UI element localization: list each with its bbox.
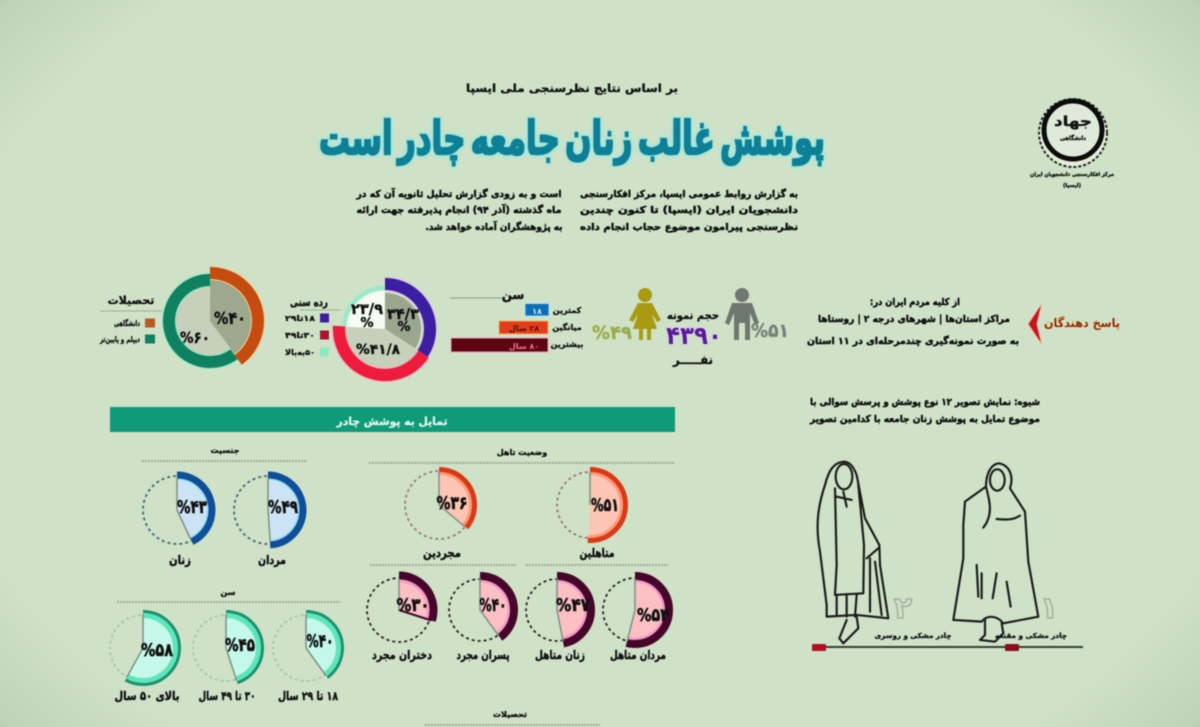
pie: single 36 (404, 470, 474, 540)
legend: education: تحصیلات (108, 294, 154, 307)
pie: married women 47: %۴۷ (556, 595, 590, 616)
illustration: chador and scarf (818, 462, 888, 643)
age bars: کمترین (553, 306, 582, 315)
heading: marital status: وضعیت تاهل (497, 448, 547, 457)
age bars: میانگین (552, 322, 582, 332)
label: single boys: پسران مجرد (456, 648, 510, 662)
pie: single girls 30: %۳۰ (396, 595, 430, 616)
logo: مرکز افکارسنجی دانشجویان ایران (1030, 171, 1114, 178)
label: married women: زنان متاهل (535, 648, 585, 662)
intro text: left column: است و به زودی گزارش تحلیل ثانویه آن که در (356, 187, 562, 200)
icon: man (725, 288, 759, 340)
pie: single 36: %۳۶ (436, 493, 468, 514)
male share: %۵۱ (751, 320, 789, 342)
number 1: ۱ (1040, 591, 1058, 626)
age bars: سن (502, 288, 524, 302)
banner: tendency to chador (110, 407, 675, 432)
legend: education (99, 294, 162, 344)
pie: married men 54 (601, 576, 669, 644)
legend: education: دیپلم و پایین‌تر (99, 335, 140, 344)
intro text: right column: به گزارش روابط عمومی ایسپا، مرکز افکارسنجی (580, 188, 798, 200)
logo: (ایسپا) (1063, 183, 1081, 189)
donut: age groups: %۴۱/۸ (356, 342, 400, 358)
label: single: مجردین (423, 546, 461, 560)
subtitle: بر اساس نتایج نظرسنجی ملی ایسپا (466, 82, 678, 95)
label: single girls: دختران مجرد (372, 648, 432, 662)
pie: age 30 to 49: %۴۵ (225, 635, 255, 656)
pie: men 49 (233, 475, 303, 545)
legend: age groups: رده سنی (290, 296, 328, 309)
pie: women 43: %۴۳ (177, 497, 207, 518)
respondents description: مراکز استان‌ها | شهرهای درجه ۲ | روستاها (818, 314, 1010, 325)
age bars: بیشترین (551, 340, 583, 349)
timeline (812, 644, 1083, 651)
heading: age: سن (220, 588, 236, 597)
label: men: مردان (258, 553, 286, 567)
icon: woman (629, 288, 661, 340)
legend: age groups: ۳۰تا۴۹ (285, 331, 315, 340)
donut: education (153, 264, 267, 378)
respondents description: از کلیه مردم ایران در: (870, 297, 960, 308)
heading: gender: جنسیت (211, 446, 240, 455)
donut: age groups: ۳۴/۳ (387, 305, 419, 323)
label: age 18 to 29: ۱۸ تا ۲۹ سال (278, 689, 339, 703)
intro text: left column (356, 187, 562, 233)
pie: age 18 to 29: %۴۰ (306, 631, 334, 652)
method text (809, 397, 1040, 425)
pie: age over 50: %۵۸ (141, 640, 173, 661)
intro text: right column: دانشجویان ایران (ایسپا) تا کنون چندین (580, 205, 798, 216)
pie: women 43 (142, 475, 212, 545)
age bars: ۸۰ سال (509, 342, 539, 351)
method text: شیوه: نمایش تصویر ۱۲ نوع پوشش و پرسش سوالی با (810, 397, 1040, 408)
pie: age over 50 (106, 612, 180, 684)
donut: education: %۶۰ (180, 328, 210, 347)
pie: age 30 to 49 (190, 612, 262, 684)
pie: married women 47 (523, 576, 591, 644)
sample size (666, 309, 722, 367)
logo: جهاد (1054, 114, 1092, 130)
legend: education: دانشگاهی (114, 318, 140, 328)
label: women: زنان (169, 553, 191, 567)
donut: education: %۴۰ (214, 309, 246, 329)
age bars (450, 288, 583, 352)
pie: married 51 (554, 470, 626, 540)
sample size: نفـــــر (672, 353, 713, 367)
donut: age groups: % (397, 320, 411, 335)
age bars: ۲۸ سال (509, 324, 539, 333)
pie: married 51: %۵۱ (591, 495, 619, 516)
caption: chador and maghnaeh: چادر مشکی و مقنعه (995, 632, 1067, 640)
intro text: left column: به پژوهشگران آماده خواهد شد. (426, 220, 562, 233)
respondents description: به صورت نمونه‌گیری چندمرحله‌ای در ۱۱ استان (807, 335, 1019, 347)
pie: age 18 to 29 (270, 612, 342, 684)
legend: age groups (285, 296, 340, 357)
heading: education: تحصیلات (493, 710, 527, 719)
number 2: ۲ (894, 591, 912, 626)
label: married: متاهلین (580, 546, 614, 560)
respondents description (807, 297, 1019, 347)
label: over 50: بالای ۵۰ سال (114, 689, 180, 703)
pie: single girls 30 (364, 576, 434, 644)
pie: men 49: %۴۹ (268, 497, 298, 518)
banner: tendency to chador: تمایل به پوشش چادر (336, 415, 448, 428)
intro text: left column: ماه گذشته (آذر ۹۴) انجام پذیرفته جهت ارائه (356, 203, 562, 216)
female share: %۴۹ (592, 322, 632, 344)
sample size: ۴۳۹۰ (666, 321, 722, 350)
respondents label (1028, 303, 1120, 345)
logo (1030, 99, 1114, 189)
logo: دانشگاهی (1060, 134, 1086, 142)
pie: married men 54: %۵۴ (637, 605, 669, 626)
respondents label: پاسخ دهندگان (1044, 316, 1120, 330)
pie: single boys 40 (446, 576, 514, 644)
sample size: حجم نمونه (667, 309, 719, 322)
donut: age groups (321, 265, 449, 393)
title: پوشش غالب زنان جامعه چادر است (319, 111, 825, 166)
legend: age groups: ۱۸تا۲۹ (285, 314, 315, 323)
donut: age groups: ۲۳/۹ (351, 300, 383, 318)
donut: age groups: % (360, 316, 374, 331)
label: age 30 to 49: ۳۰ تا ۴۹ سال (198, 689, 256, 703)
illustration: chador and maghnaeh (953, 463, 1038, 642)
intro text: right column (580, 188, 798, 233)
pie: single boys 40: %۴۰ (480, 595, 506, 616)
method text: موضوع تمایل به پوشش زنان جامعه با کدامین تصویر (809, 414, 1040, 425)
legend: age groups: ۵۰به‌بالا (285, 348, 315, 357)
age bars: ۱۸ (532, 307, 542, 316)
label: married men: مردان متاهل (610, 648, 666, 662)
intro text: right column: نظرسنجی پیرامون موضوع حجاب انجام داده (580, 222, 798, 233)
caption: chador and scarf: چادر مشکی و روسری (874, 632, 952, 640)
